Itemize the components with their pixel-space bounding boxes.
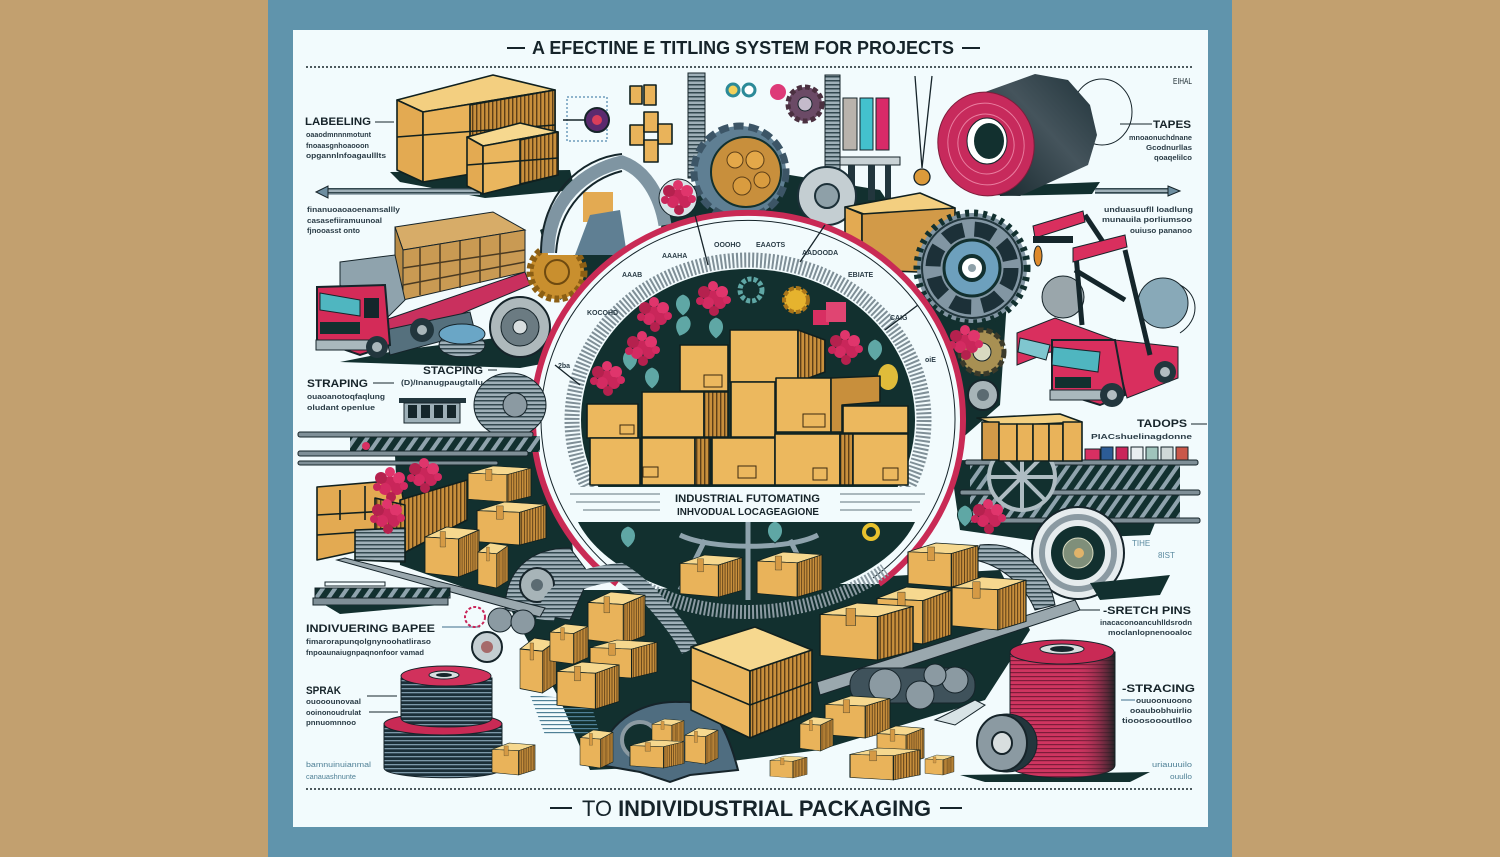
label: upper right paragraph: munauila porliumsoo — [1102, 217, 1192, 224]
ring: thin inner line — [541, 220, 955, 578]
icon: steel arch — [541, 154, 697, 255]
icon: film reel, right — [1032, 507, 1170, 600]
label: small reel notes: TIHE — [1132, 539, 1150, 548]
label: small reel notes — [1132, 539, 1175, 560]
label: stretch pins: -SRETCH PINS — [1103, 605, 1191, 617]
label: staping: STACPING — [423, 365, 483, 377]
icon: forklift truck — [1017, 211, 1195, 407]
label: tapes: Gcodnurllas — [1146, 145, 1192, 152]
icon: stacked tape spools, lower left — [384, 666, 502, 778]
label: tapes: TAPES — [1153, 119, 1191, 131]
ring labels: oiE — [925, 357, 936, 364]
ring: hatched steel band — [572, 260, 924, 580]
banner: center caption: INHVODUAL LOCAGEAGIONE — [677, 507, 819, 518]
ring labels: OOOHO — [714, 242, 741, 249]
label: sprak — [306, 685, 398, 781]
ring pointer lines — [555, 215, 918, 385]
label: sprak: canauashnunte — [306, 774, 356, 781]
label: labeling: opgannlnfoagaulllts — [306, 153, 386, 160]
icon: upper machinery with columns and gears — [688, 73, 900, 225]
label: tapes: mnoaonuchdnane — [1129, 135, 1192, 142]
ring labels: AADOODA — [802, 250, 838, 257]
icon: large carton stack, top left — [397, 75, 558, 194]
label: stracing: -STRACING — [1122, 683, 1195, 695]
label: indivuering bapee: INDIVUERING BAPEE — [306, 623, 435, 635]
arrow: right long arrow — [1095, 186, 1180, 196]
label: indivuering bapee: fnpoaunaiugnpaqnonfoor vamad — [306, 650, 424, 657]
conveyor: small left belt — [313, 582, 450, 614]
label: upper left paragraph: casasefiiramuunoal — [307, 218, 382, 225]
carton labels — [620, 375, 898, 480]
label: upper left paragraph — [307, 207, 400, 235]
icon: small gear with berries, right — [948, 325, 1004, 410]
illustration: left lower carton stack and lumber — [317, 480, 467, 562]
ring labels — [558, 242, 936, 370]
icon: delivery truck with crate load — [316, 212, 530, 358]
label: stracing: ouullo — [1170, 774, 1192, 781]
label: sprak: SPRAK — [306, 685, 341, 697]
label: labeling: fnoaasgnhoaooon — [306, 143, 369, 150]
central carton stack — [587, 330, 908, 485]
ring labels: EBIATE — [848, 272, 873, 279]
label: upper right paragraph: unduasuufll loadlung — [1104, 207, 1193, 214]
label: tadops — [1091, 418, 1207, 441]
dark ground shadows behind illustrations — [340, 170, 1180, 770]
label: staping — [401, 365, 497, 387]
label: stracing: ooaubobhuirlio — [1130, 708, 1192, 715]
label: upper left paragraph: fjnooasst onto — [307, 228, 360, 235]
ring labels: AAAB — [622, 272, 642, 279]
label: stracing: ouuoonuoono — [1136, 698, 1192, 705]
icon: pendant marker — [914, 76, 932, 185]
icon: raspberries, left lower — [370, 458, 442, 534]
ring labels: AAAHA — [662, 253, 687, 260]
ring: crimson arc — [533, 213, 963, 584]
icon: right carton pile — [820, 543, 1026, 660]
background: blue frame — [268, 0, 1232, 857]
label: sprak: pnnuomnnoo — [306, 720, 356, 727]
icon: coil behind right cartons — [975, 545, 1055, 610]
icon: coil, left of circle — [474, 373, 546, 437]
icon: small wheel cluster — [465, 607, 535, 662]
label: sprak: ouooounovaal — [306, 699, 361, 706]
label: upper right paragraph — [1102, 207, 1193, 235]
ring labels: KOCOHD — [587, 310, 618, 317]
diagram: small process schematic — [563, 85, 672, 162]
icon: dark film and small cartons bottom centre — [580, 702, 738, 782]
icon: carton near gear, top right of circle — [845, 193, 955, 272]
icon: cartons, left lower — [425, 466, 546, 588]
label: tadops: PIACshuelinagdonne — [1091, 434, 1192, 441]
label: stracing: tiooosoooutlloo — [1122, 718, 1192, 725]
icon: small reel wheel — [977, 714, 1037, 772]
title: A EFECTINE E TITLING SYSTEM FOR PROJECTS — [532, 38, 954, 58]
label: stracing — [1121, 683, 1195, 781]
label: labeling — [305, 116, 394, 160]
label: tapes — [1120, 77, 1192, 162]
icon: coloured control chips — [1085, 447, 1188, 460]
icon: film wheel and disc stack — [439, 297, 550, 357]
label: tapes: EIHAL — [1173, 77, 1192, 86]
lower hub with spokes — [578, 521, 915, 612]
ring labels: EAAOTS — [756, 242, 786, 249]
label: stretch pins: inacaconoancuhlldsrodn — [1100, 620, 1192, 627]
conveyor: left rails — [298, 432, 540, 465]
icon: big steel gear — [917, 213, 1027, 323]
label: stracing: uriauuuilo — [1152, 762, 1192, 769]
footer title: TO INDIVIDUSTRIAL PACKAGING — [582, 796, 931, 821]
ring labels: CAIG — [890, 315, 908, 322]
label: indivuering bapee — [306, 623, 480, 657]
label: tadops: TADOPS — [1137, 418, 1187, 430]
conveyor: right ramp — [817, 600, 1080, 695]
icon: berries, right conveyor — [957, 499, 1006, 534]
berries and leaves — [590, 279, 898, 396]
label: labeling: LABEELING — [305, 116, 371, 128]
label: sprak: ooinonoudrulat — [306, 710, 362, 717]
icon: small carton by spool — [492, 743, 535, 775]
icon: roller assembly — [850, 664, 985, 725]
banner: center caption — [566, 487, 930, 522]
label: staping: (D)/Inanugpaugtallu — [401, 380, 483, 387]
icon: lower central carton pile — [520, 592, 657, 709]
conveyor: left ramp — [337, 558, 545, 617]
icon: crimson spool, lower right — [960, 640, 1150, 782]
conveyor: right rails — [960, 444, 1200, 523]
label: indivuering bapee: fimarorapunqolgnynoohatliraso — [306, 639, 431, 646]
label: strapping — [307, 378, 394, 412]
label: sprak: bamnuinuianmal — [306, 762, 372, 769]
label: upper right paragraph: ouiuso pananoo — [1130, 228, 1192, 235]
icon: small machine — [399, 398, 466, 423]
hatch shadow strip, bottom centre — [530, 695, 600, 735]
label: upper left paragraph: finanuoaoaoenamsallly — [307, 207, 400, 214]
label: tapes: qoaqelilco — [1154, 155, 1192, 162]
label: stretch pins: moclanlopnenooaloc — [1108, 630, 1192, 637]
ring labels: 2ba — [558, 363, 570, 370]
icon: lower right small cartons — [770, 696, 954, 780]
label: strapping: ouaoanotoqfaqlung — [307, 394, 385, 401]
interior: dark field — [581, 269, 915, 571]
label: strapping: STRAPING — [307, 378, 368, 390]
panel: central circular diagram — [533, 213, 963, 612]
label: strapping: oludant openlue — [307, 405, 375, 412]
label: labeling: oaaodmnnnmotunt — [306, 132, 372, 139]
panel: white sheet — [293, 30, 1208, 827]
arrow: left long arrow — [316, 186, 480, 198]
icon: big carton, bottom centre — [691, 627, 812, 738]
icon: wheel under cartons — [505, 548, 690, 650]
label: stretch pins — [1080, 605, 1192, 637]
icon: large tape roll — [928, 74, 1132, 205]
banner: center caption: INDUSTRIAL FUTOMATING — [675, 493, 820, 505]
icon: cartons on right conveyor — [977, 414, 1082, 461]
icon: gold gear — [530, 245, 584, 299]
ring: outer crimson band — [533, 213, 963, 584]
label: small reel notes: 8IST — [1158, 551, 1175, 560]
